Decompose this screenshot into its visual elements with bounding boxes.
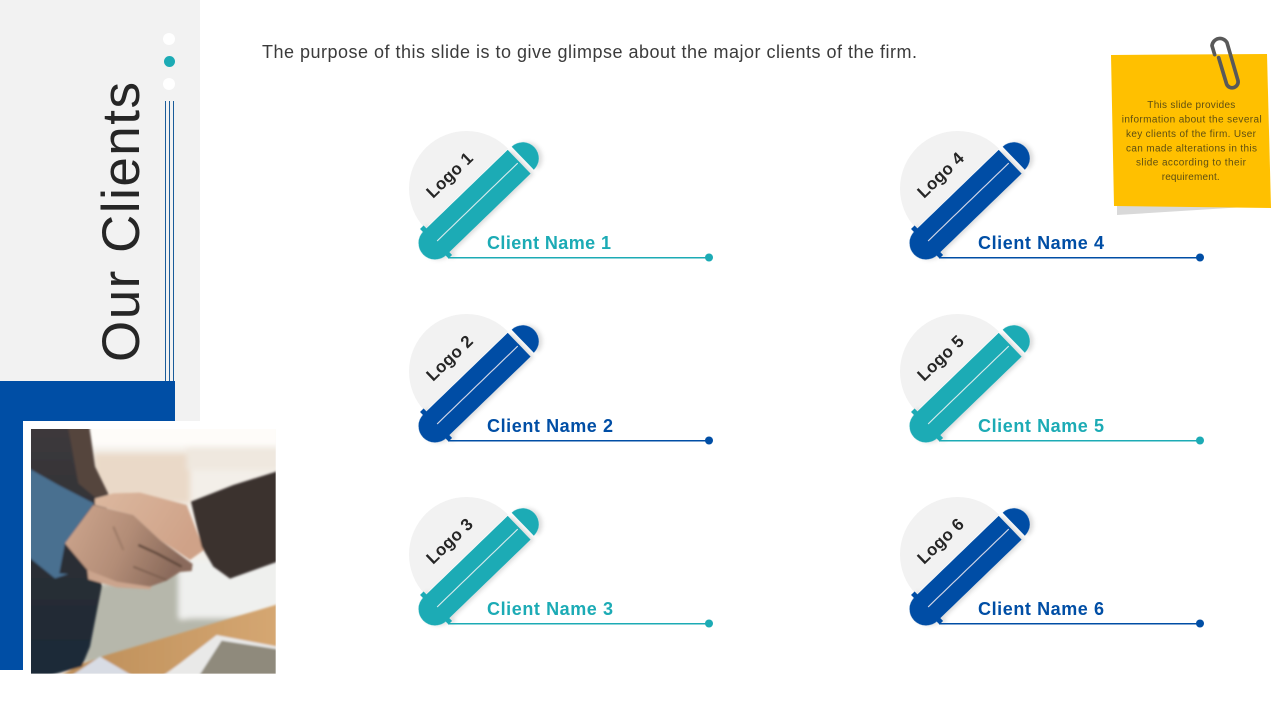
client 1 (409, 131, 713, 269)
photo: handshake (31, 429, 276, 674)
icon: paperclip (1212, 38, 1238, 88)
description text: The purpose of this slide is to give glimpse about the major clients of the firm. (262, 42, 917, 62)
sticky note text: slide according to their (1136, 158, 1247, 168)
connector line (939, 440, 1200, 442)
client name: Client Name 2 (487, 416, 613, 436)
pencil icon (409, 315, 549, 452)
logo label: Logo 4 (914, 148, 968, 202)
connector line (448, 440, 709, 442)
pencil icon (900, 498, 1040, 635)
decorative dots (163, 33, 175, 90)
client 6 (900, 497, 1204, 635)
logo label: Logo 1 (423, 149, 477, 202)
right sleeve (191, 468, 287, 579)
logo label: Logo 6 (914, 515, 968, 568)
logo badge (900, 314, 999, 411)
logo label: Logo 2 (423, 332, 477, 385)
logo badge (900, 497, 999, 594)
client name: Client Name 4 (978, 233, 1104, 253)
left grey panel (0, 0, 200, 421)
blue block (0, 381, 175, 670)
right hand (95, 493, 204, 560)
photo frame (23, 421, 276, 674)
pencil icon (409, 498, 549, 635)
connector line (448, 623, 709, 624)
client 2 (409, 314, 713, 452)
title: Our Clients (92, 82, 151, 362)
logo badge (409, 131, 508, 228)
pencil icon (900, 315, 1040, 452)
sticky note text: requirement. (1162, 172, 1220, 183)
client name: Client Name 6 (978, 599, 1104, 619)
logo badge (409, 497, 508, 594)
sticky note (1111, 38, 1271, 215)
logo label: Logo 3 (423, 515, 477, 568)
logo badge (409, 314, 508, 411)
sticky note text: This slide provides (1147, 100, 1235, 111)
client name: Client Name 3 (487, 599, 613, 619)
sticky note text (1122, 100, 1262, 183)
client name: Client Name 1 (487, 233, 611, 253)
connector line (939, 623, 1200, 624)
sticky note text: can made alterations in this (1126, 144, 1257, 154)
client name: Client Name 5 (978, 416, 1104, 436)
client 4 (900, 131, 1204, 269)
connector line (448, 257, 709, 258)
pencil icon (409, 132, 549, 269)
pencil icon (900, 132, 1040, 269)
sticky note text: key clients of the firm. User (1126, 129, 1257, 140)
left hand (65, 505, 193, 587)
connector line (939, 257, 1200, 258)
logo label: Logo 5 (914, 332, 968, 385)
client 3 (409, 497, 713, 635)
sticky note text: information about the several (1122, 114, 1262, 126)
logo badge (900, 131, 999, 228)
client 5 (900, 314, 1204, 452)
fingers underneath (87, 567, 153, 589)
